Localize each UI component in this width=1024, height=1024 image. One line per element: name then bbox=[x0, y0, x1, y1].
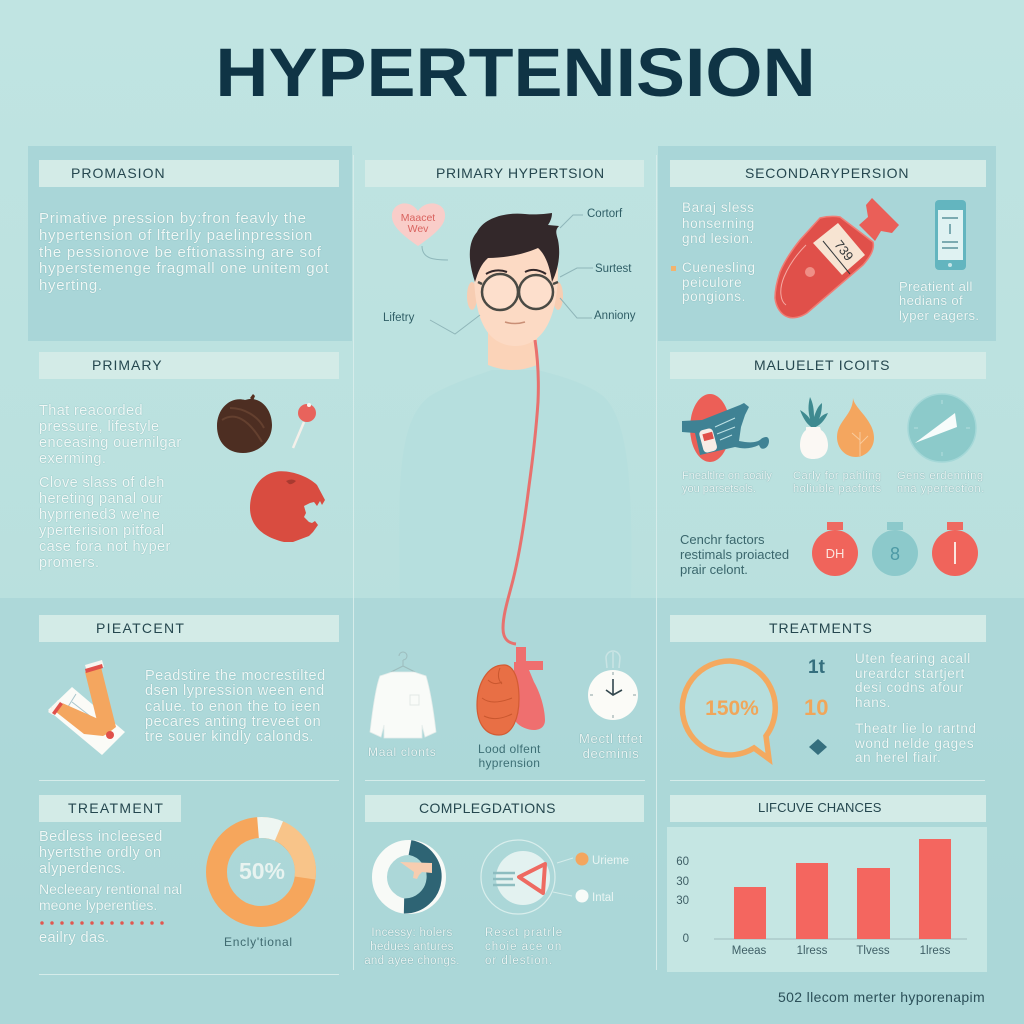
heading: complegdations bbox=[365, 795, 644, 822]
label: lifetry: Lifetry bbox=[383, 312, 414, 324]
stat: 10: 10 bbox=[804, 695, 828, 720]
text: promasion body: hypertension of lfterlly paelinpression bbox=[39, 227, 313, 244]
bar chart: 60 bbox=[676, 856, 689, 868]
text: promasion body: the pessionove be eftionassing are sof bbox=[39, 244, 322, 261]
text: caption 1: Fnealtlre on aoaily bbox=[682, 470, 772, 482]
text: pieatcent body: pecares anting treveet on bbox=[145, 714, 321, 730]
text: secondary 1: Baraj sless bbox=[682, 200, 755, 215]
figure: person illustration bbox=[399, 213, 631, 644]
label: surtest: Surtest bbox=[595, 263, 631, 275]
text: secondary 2 bbox=[682, 260, 756, 304]
rule bbox=[670, 780, 985, 781]
icon: teal diamond bbox=[809, 739, 827, 755]
text: caption 1: you parsetsols. bbox=[682, 483, 756, 495]
text: treatments body bbox=[855, 651, 971, 710]
text: treatments body 2 bbox=[854, 721, 977, 765]
text: primary body 2: hereting panal our bbox=[39, 491, 163, 507]
text: caption left: and ayee chongs. bbox=[364, 955, 460, 967]
bar chart bbox=[667, 827, 987, 972]
label: mecit: Mectl ttfet bbox=[579, 731, 643, 746]
icon: shirt bbox=[370, 652, 436, 738]
text: treatment body 2: Necleeary rentional nal bbox=[39, 881, 182, 897]
text: secondary 3: Preatient all bbox=[899, 279, 973, 294]
bar chart: 1lress bbox=[920, 945, 951, 957]
icon: complication ring bbox=[380, 848, 438, 906]
icon: blood pressure meter bbox=[775, 198, 899, 318]
icon: cuff bbox=[682, 394, 769, 462]
text: caption 2: holiuble pacforts bbox=[793, 483, 882, 495]
text: gench factors bbox=[680, 532, 789, 577]
text: primary body: enceasing ouernilgar bbox=[39, 435, 182, 451]
bar chart: 1lress bbox=[797, 945, 828, 957]
text: secondary 1: gnd lesion. bbox=[682, 231, 754, 246]
stat: 11: 1t bbox=[808, 657, 825, 678]
text: caption right bbox=[485, 926, 563, 967]
label: loood: Lood olfent bbox=[478, 742, 541, 756]
icon: heart label: Wev bbox=[408, 223, 429, 235]
heading: secondary bbox=[670, 160, 986, 187]
icon: heart label bbox=[392, 203, 448, 260]
rule bbox=[365, 780, 645, 781]
panel: secondary background bbox=[658, 146, 996, 341]
text: promasion body bbox=[39, 210, 329, 294]
bar chart: Meeas bbox=[732, 945, 767, 957]
text: primary body 2: case fora not hyper bbox=[39, 539, 171, 555]
text: primary body 2: Clove slass of deh bbox=[39, 475, 165, 491]
label: loood bbox=[478, 742, 541, 770]
heading: primary: PRIMARY bbox=[92, 357, 163, 373]
text: secondary 3 bbox=[899, 279, 979, 323]
label lines bbox=[430, 215, 593, 334]
bar chart: Tlvess bbox=[856, 945, 890, 957]
text: treatment body 2: meone lyperenties. bbox=[39, 897, 157, 913]
heading: maluelet icoits bbox=[670, 352, 986, 379]
icon: gauge dial bbox=[908, 394, 976, 462]
text: secondary 2: pongions. bbox=[682, 289, 746, 304]
text: secondary 3: hedians of bbox=[899, 293, 963, 308]
divider bbox=[353, 155, 354, 970]
callout: 150%: 150% bbox=[705, 697, 759, 720]
text: primary body bbox=[39, 403, 182, 467]
title: HYPERTENISION bbox=[215, 34, 816, 111]
text: treatments body: Uten fearing acall bbox=[855, 651, 971, 666]
text: secondary 1 bbox=[682, 200, 755, 246]
label: loood: hyprension bbox=[478, 756, 540, 770]
heading: primary bbox=[39, 352, 339, 379]
text: caption left: hedues antures bbox=[370, 941, 454, 953]
text: caption 2: Carly for pahling bbox=[793, 470, 882, 482]
text: gench factors: Cenchr factors bbox=[680, 532, 765, 547]
text: caption right: or dlestion. bbox=[485, 955, 553, 967]
icon: clock bbox=[588, 651, 638, 720]
text: primary body: pressure, lifestyle bbox=[39, 419, 159, 435]
text: gench factors: restimals proiacted bbox=[680, 547, 789, 562]
bar chart: 30 bbox=[676, 876, 689, 888]
text: early das: eailry das. bbox=[39, 930, 110, 946]
icon: teal badge: 8 bbox=[890, 544, 900, 564]
text: caption 1 bbox=[682, 470, 772, 495]
text: treatment body 2 bbox=[39, 881, 182, 914]
dotted line bbox=[40, 921, 164, 925]
heading: secondary: SECONDARYPERSION bbox=[745, 165, 909, 181]
text: pieatcent body: dsen lypression ween end bbox=[145, 683, 325, 699]
text: secondary 3: lyper eagers. bbox=[899, 308, 979, 323]
text: caption left bbox=[364, 926, 460, 967]
text: promasion body: hyperstemenge fragmall one unitem got bbox=[39, 260, 329, 277]
text: treatments body 2: an herel fiair. bbox=[855, 750, 941, 765]
heading: primary hypertsion: PRIMARY HYPERTSION bbox=[436, 165, 605, 181]
divider bbox=[656, 155, 657, 970]
text: caption 3 bbox=[897, 470, 985, 495]
text: treatment body bbox=[39, 829, 163, 877]
heading: lifecuve changes bbox=[670, 795, 986, 822]
label: mecit: decminis bbox=[583, 746, 639, 761]
text: caption 2 bbox=[793, 470, 882, 495]
icon: ointment tubes bbox=[48, 660, 125, 755]
heading: maluelet icoits: MALUELET ICOITS bbox=[754, 357, 890, 373]
legend: complications bbox=[553, 852, 629, 904]
icon: red badge DH bbox=[812, 522, 858, 576]
text: promasion body: Primative pression by:fron feavly the bbox=[39, 210, 307, 227]
text: treatments body: ureardcr startjert bbox=[855, 666, 965, 681]
text: pieatcent body bbox=[144, 668, 326, 745]
text: treatments body 2: Theatr lie lo rartnd bbox=[855, 721, 977, 736]
text: primary body 2: hyprrened3 we'ne bbox=[39, 507, 160, 523]
heading: promasion bbox=[39, 160, 339, 187]
text: primary body 2: promers. bbox=[39, 555, 99, 571]
label: meal clonts: Maal clonts bbox=[368, 745, 436, 759]
text: treatment body: hyertsthe ordly on bbox=[39, 845, 161, 861]
text: primary body 2 bbox=[38, 475, 171, 571]
icon: lollipop bbox=[293, 403, 316, 448]
text: primary body 2: yperterision pitfoal bbox=[39, 523, 165, 539]
text: gench factors: prair celont. bbox=[680, 562, 748, 577]
heading: complegdations: COMPLEGDATIONS bbox=[419, 800, 556, 816]
panel: promasion background bbox=[28, 146, 352, 341]
heading: treatments bbox=[670, 615, 986, 642]
heading: pieatcent: PIEATCENT bbox=[96, 620, 185, 636]
label: mecit bbox=[579, 731, 643, 761]
callout: 150% bbox=[682, 661, 775, 759]
icon: orange drop bbox=[837, 398, 874, 457]
icon: red badge alert bbox=[932, 522, 978, 576]
label: anniony: Anniony bbox=[594, 310, 636, 322]
bar chart: 30 bbox=[676, 895, 689, 907]
text: caption right: Resct pratrle bbox=[485, 927, 563, 939]
icon: potted plant bbox=[800, 397, 828, 459]
rule bbox=[39, 780, 339, 781]
text: treatment body: Bedless incleesed bbox=[39, 829, 163, 845]
text: caption left: Incessy: holers bbox=[371, 927, 453, 939]
legend: complications: Urieme bbox=[592, 855, 629, 867]
text: treatments body: desi codns afour bbox=[855, 680, 964, 695]
donut chart 50% bbox=[216, 827, 306, 916]
text: caption right: choie ace on bbox=[485, 941, 562, 953]
icon: teal badge bbox=[872, 522, 918, 576]
text: pieatcent body: calue. to enon the to ieen bbox=[145, 699, 321, 715]
icon: dark fruit bbox=[217, 394, 272, 453]
text: secondary 1: honserning bbox=[682, 216, 755, 230]
bullet bbox=[671, 266, 676, 271]
heading: treatment: TREATMENT bbox=[68, 800, 164, 816]
legend: complications: Intal bbox=[592, 892, 614, 904]
text: promasion body: hyerting. bbox=[39, 277, 103, 294]
icon: red badge DH: DH bbox=[826, 546, 844, 561]
text: treatment body: alyperdencs. bbox=[39, 861, 126, 877]
text: pieatcent body: Peadstire the mocrestilted bbox=[145, 668, 326, 684]
heading: primary hypertsion bbox=[365, 160, 644, 187]
icon: heart label: Maacet bbox=[401, 212, 435, 224]
footer note: 502 llecom merter hyporenapim bbox=[778, 989, 985, 1005]
label: cortorf: Cortorf bbox=[587, 208, 622, 220]
text: caption 3: nna ypertection. bbox=[897, 483, 985, 495]
label: encytional: Encly'tional bbox=[224, 935, 293, 949]
text: secondary 2: peiculore bbox=[682, 275, 742, 290]
text: caption 3: Gens erdenning bbox=[897, 470, 984, 482]
heading: treatments: TREATMENTS bbox=[769, 620, 873, 636]
icon: lungs and organ bbox=[477, 647, 545, 735]
text: treatments body 2: wond nelde gages bbox=[855, 736, 974, 751]
heading: promasion: PROMASION bbox=[71, 165, 166, 181]
icon: phone bbox=[935, 200, 966, 270]
text: primary body: exerming. bbox=[39, 451, 106, 467]
rule bbox=[39, 974, 339, 975]
text: primary body: That reacorded bbox=[39, 403, 143, 419]
text: treatments body: hans. bbox=[855, 695, 891, 710]
lower background band bbox=[0, 598, 1024, 1024]
icon: bitten apple bbox=[250, 471, 325, 542]
heading: treatment bbox=[39, 795, 181, 822]
heading: lifecuve changes: LIFCUVE CHANCES bbox=[758, 800, 882, 815]
icon: target diagram bbox=[481, 840, 555, 914]
icon: blood pressure meter: 739 bbox=[831, 237, 857, 264]
bar chart: 0 bbox=[683, 933, 689, 945]
heading: pieatcent bbox=[39, 615, 339, 642]
text: secondary 2: Cuenesling bbox=[682, 260, 756, 275]
donut chart 50%: 50% bbox=[239, 858, 285, 884]
text: pieatcent body: tre souer kindly calonds. bbox=[145, 729, 314, 745]
